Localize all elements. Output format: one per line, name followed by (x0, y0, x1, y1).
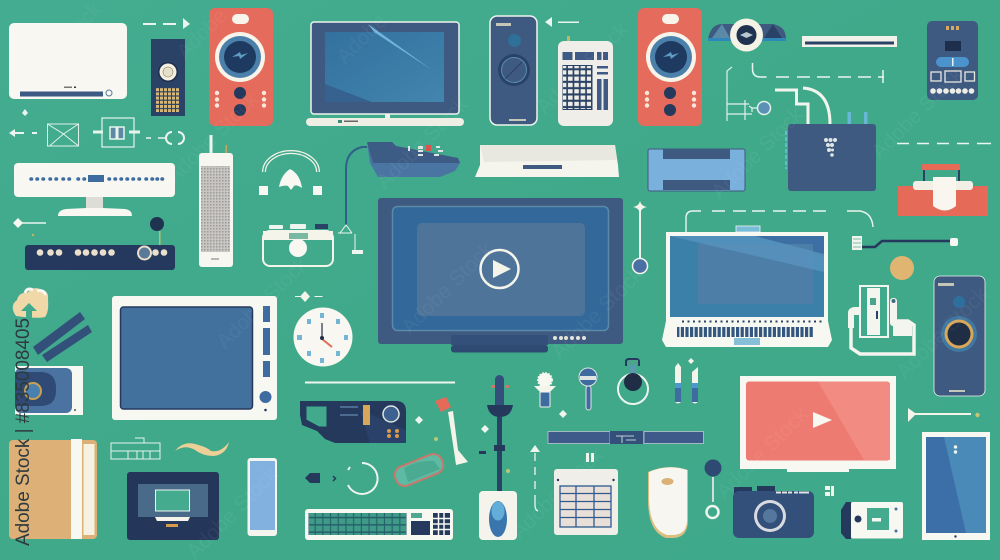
device: white mouse (648, 467, 688, 538)
device: calculator (558, 36, 613, 126)
arrow: dashed right (143, 18, 190, 29)
dashed line right (897, 142, 991, 144)
device: dark slim bar (548, 431, 704, 444)
stock watermark pattern: Adobe Stock (5, 0, 106, 99)
cable (852, 236, 958, 250)
device: dark phone (490, 16, 537, 125)
stock watermark pattern: Adobe Stock (707, 103, 808, 204)
device: light-blue phone (248, 458, 277, 536)
icon: outlined device (93, 118, 140, 147)
device: red phone left (209, 8, 273, 126)
device: webcam (708, 18, 786, 52)
device: tall remote (199, 135, 233, 267)
device: blue tray (648, 149, 745, 191)
icon: tan circle (890, 256, 914, 280)
stock watermark pattern: Adobe Stock (532, 18, 633, 119)
device: top monitor (306, 22, 464, 126)
clock (294, 308, 352, 366)
schematic lines (727, 67, 770, 121)
icon: envelope (48, 124, 78, 146)
arrow: dashed up (530, 445, 540, 511)
icon: lightbulb (534, 373, 556, 407)
device: small bar with knob (13, 217, 175, 270)
stock watermark pattern: Adobe Stock (212, 253, 313, 354)
device: white slot (802, 36, 897, 47)
icon: small arrow (305, 473, 336, 483)
icon: cloud upload (13, 288, 48, 319)
device: keypad panel (554, 469, 618, 535)
stock watermark pattern: Adobe Stock (507, 443, 608, 544)
dashed connector over laptop (686, 211, 873, 232)
icon: ring pendant (618, 359, 648, 404)
device: speaker phone (934, 276, 985, 396)
white rule (305, 382, 455, 384)
icon: goggles (392, 451, 446, 489)
icon: dark sticks (33, 312, 92, 362)
laptop (662, 226, 832, 347)
device: red phone right (638, 8, 702, 126)
icon: round mic (579, 368, 597, 410)
icon: star pin (632, 201, 648, 274)
stock watermark pattern: Adobe (332, 9, 391, 69)
icon: ring arc (348, 463, 378, 494)
keyboard (305, 509, 453, 540)
icon: horn (908, 408, 980, 422)
icon: key fob (704, 460, 722, 518)
device: blue tablet (922, 432, 990, 540)
stock watermark pattern: Adobe Stock (892, 283, 993, 384)
device: red video tablet (740, 376, 896, 472)
stock watermark pattern: Adobe Stock (547, 263, 648, 364)
icon: small squares (825, 486, 834, 496)
icon: vials (675, 358, 698, 404)
icon: dashes and parentheses (146, 132, 184, 144)
main TV with play button (378, 198, 623, 352)
device: notebook (9, 439, 97, 539)
divider star (295, 291, 322, 302)
device: camera (733, 486, 814, 538)
icon: outlined camera (263, 224, 333, 266)
device: white tray (475, 145, 619, 177)
icon: pause (586, 453, 594, 462)
icon: sparkles (415, 410, 567, 473)
icon: brush (435, 397, 468, 465)
microphone stand and mouse (479, 375, 517, 540)
stock watermark pattern: Adobe Stock (372, 93, 473, 194)
arrow: left with line (545, 17, 579, 27)
device: large white tablet (112, 296, 277, 420)
device: dark keypad (151, 39, 185, 116)
device: red case (898, 164, 988, 216)
device: dark control unit (300, 401, 406, 443)
dashed connector (752, 63, 884, 83)
stock watermark pattern: Adobe Stock (712, 403, 813, 504)
device: white bracket with cassette (848, 286, 914, 354)
stock watermark pattern: Adobe Stock (162, 88, 263, 189)
icon: gauge (259, 152, 322, 195)
vertical stock credit: Adobe Stock | #835008405 (13, 318, 34, 546)
device: white monitor bar (14, 163, 175, 216)
device: dark box with screen (127, 472, 219, 540)
stock watermark pattern: Adobe (172, 4, 231, 64)
icon: outlined toolbox (111, 438, 160, 459)
device: router (775, 88, 876, 191)
icon: wave (175, 442, 229, 456)
device: remote with cable (338, 142, 460, 254)
device: small white unit (841, 502, 903, 539)
device: control module (927, 21, 978, 100)
stock watermark pattern: Adobe Stock (867, 63, 968, 164)
arrow: left dashed (9, 109, 37, 137)
device: white box (9, 23, 127, 99)
stock watermark pattern: Adobe Stock (397, 238, 498, 339)
device: hard drive (15, 366, 83, 415)
